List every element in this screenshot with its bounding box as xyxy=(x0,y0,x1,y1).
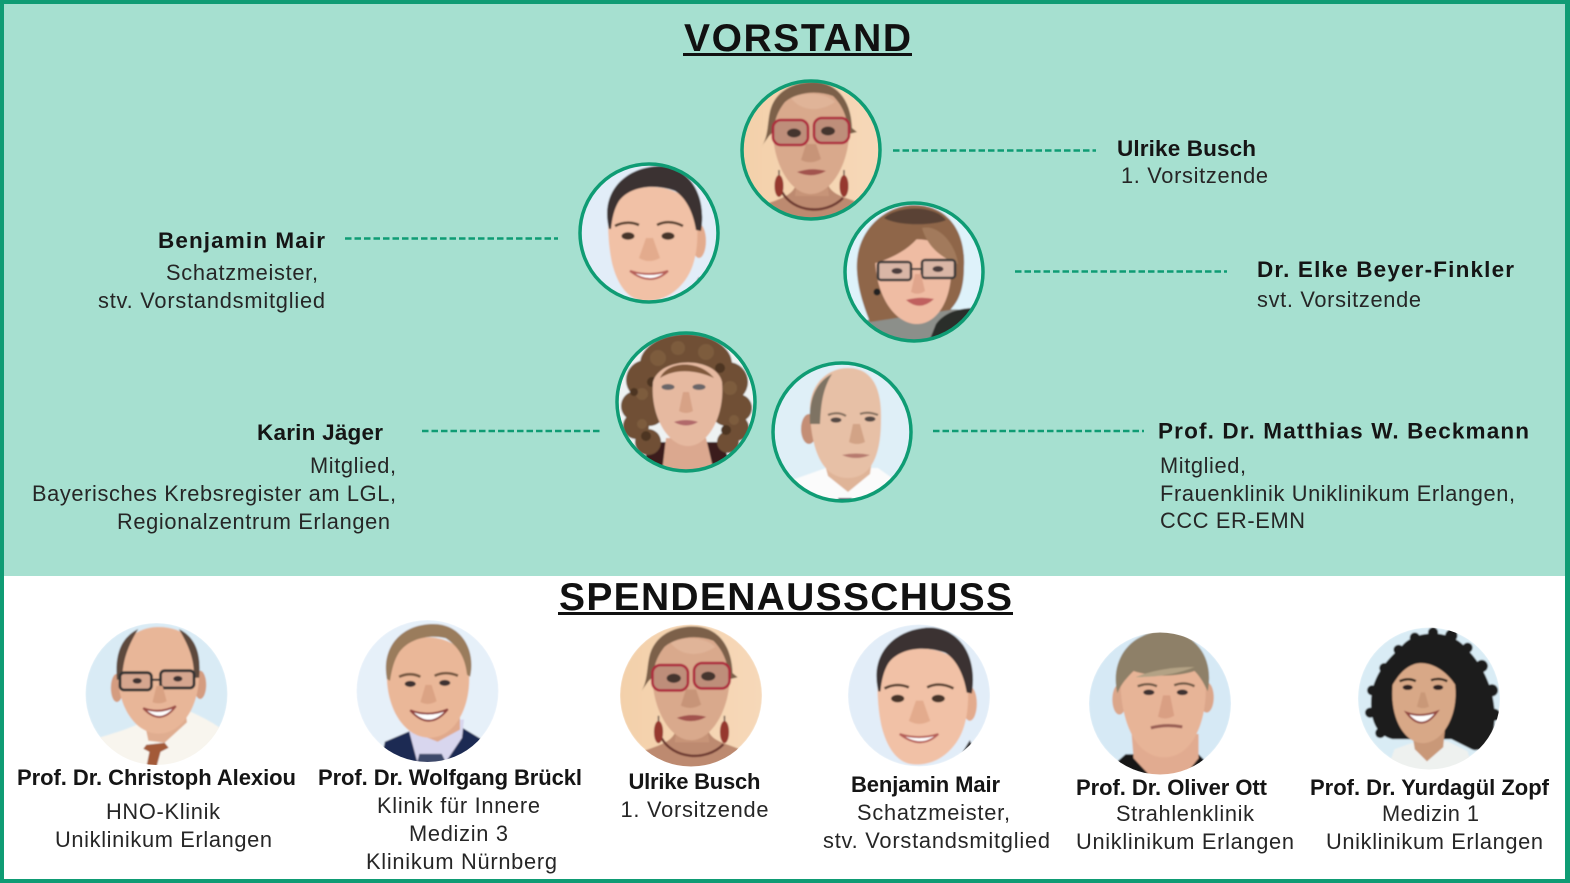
text: Benjamin Mair (Spendenausschuss): stv. Vorstandsmitglied xyxy=(823,828,1050,853)
text: Wolfgang Brückl: Medizin 3 xyxy=(409,821,508,846)
text: Matthias W. Beckmann: Prof. Dr. Matthias W. Beckmann xyxy=(1158,418,1529,444)
text: Benjamin Mair xyxy=(98,228,325,313)
portrait: Elke Beyer-Finkler xyxy=(844,202,984,344)
portrait: Wolfgang Brückl xyxy=(356,620,499,764)
text: Christoph Alexiou: Prof. Dr. Christoph Alexiou xyxy=(17,765,296,790)
text: Yurdagül Zopf: Uniklinikum Erlangen xyxy=(1326,829,1543,854)
portrait: Benjamin Mair xyxy=(579,163,719,305)
portrait: Karin Jäger xyxy=(616,332,756,472)
text: Ulrike Busch: Ulrike Busch xyxy=(1117,136,1256,161)
text: Oliver Ott: Uniklinikum Erlangen xyxy=(1076,829,1294,854)
portrait: Ulrike Busch (Spendenausschuss) xyxy=(620,624,762,769)
text: Benjamin Mair: Benjamin Mair xyxy=(158,228,325,253)
text: Matthias W. Beckmann: CCC ER-EMN xyxy=(1160,508,1305,533)
text: Elke Beyer-Finkler: svt. Vorsitzende xyxy=(1257,287,1421,312)
text: Karin Jäger: Bayerisches Krebsregister am LGL, xyxy=(32,481,396,506)
text: Elke Beyer-Finkler: Dr. Elke Beyer-Finkler xyxy=(1257,257,1514,282)
text: Ulrike Busch xyxy=(1117,136,1268,188)
text: Wolfgang Brückl: Klinik für Innere xyxy=(377,793,540,818)
text: Oliver Ott: Prof. Dr. Oliver Ott xyxy=(1076,775,1268,800)
text: Karin Jäger: Regionalzentrum Erlangen xyxy=(117,509,390,534)
text: Wolfgang Brückl xyxy=(318,765,582,874)
text: Karin Jäger: Mitglied, xyxy=(310,453,396,478)
panel: Spendenausschuss xyxy=(17,576,1550,874)
text: Benjamin Mair: Schatzmeister, xyxy=(166,260,318,285)
text: Benjamin Mair (Spendenausschuss): Schatzmeister, xyxy=(857,800,1010,825)
portrait: Ulrike Busch xyxy=(741,80,881,222)
text: Christoph Alexiou xyxy=(17,765,296,852)
portrait: Christoph Alexiou xyxy=(85,623,228,767)
text: Wolfgang Brückl: Prof. Dr. Wolfgang Brückl xyxy=(318,765,582,790)
text: Ulrike Busch (Spendenausschuss): 1. Vorsitzende xyxy=(620,797,768,822)
text: Karin Jäger xyxy=(32,420,396,534)
text: Christoph Alexiou: Uniklinikum Erlangen xyxy=(55,827,272,852)
text: Oliver Ott: Strahlenklinik xyxy=(1116,801,1254,826)
text: Benjamin Mair (Spendenausschuss) xyxy=(823,772,1050,853)
panel: Vorstand xyxy=(32,17,1529,534)
portrait: Oliver Ott xyxy=(1089,631,1231,777)
heading: Spendenausschuss: SPENDENAUSSCHUSS xyxy=(559,576,1012,619)
portrait: Benjamin Mair (Spendenausschuss) xyxy=(848,624,990,769)
text: Oliver Ott xyxy=(1076,775,1294,854)
text: Benjamin Mair (Spendenausschuss): Benjamin Mair xyxy=(851,772,1000,797)
heading: Vorstand: VORSTAND xyxy=(684,17,911,60)
text: Christoph Alexiou: HNO-Klinik xyxy=(106,799,220,824)
text: Ulrike Busch: 1. Vorsitzende xyxy=(1121,163,1268,188)
text: Elke Beyer-Finkler xyxy=(1257,257,1514,312)
text: Ulrike Busch (Spendenausschuss): Ulrike Busch xyxy=(628,769,760,794)
text: Yurdagül Zopf xyxy=(1310,775,1550,854)
text: Karin Jäger: Karin Jäger xyxy=(257,420,383,445)
text: Matthias W. Beckmann xyxy=(1158,418,1529,533)
text: Wolfgang Brückl: Klinikum Nürnberg xyxy=(366,849,557,874)
text: Ulrike Busch (Spendenausschuss) xyxy=(620,769,768,822)
text: Yurdagül Zopf: Medizin 1 xyxy=(1382,801,1479,826)
text: Yurdagül Zopf: Prof. Dr. Yurdagül Zopf xyxy=(1310,775,1550,800)
text: Matthias W. Beckmann: Frauenklinik Uniklinikum Erlangen, xyxy=(1160,481,1515,506)
portrait: Matthias W. Beckmann xyxy=(772,362,912,504)
portrait: Yurdagül Zopf xyxy=(1358,627,1500,772)
text: Matthias W. Beckmann: Mitglied, xyxy=(1160,453,1246,478)
text: Benjamin Mair: stv. Vorstandsmitglied xyxy=(98,288,325,313)
